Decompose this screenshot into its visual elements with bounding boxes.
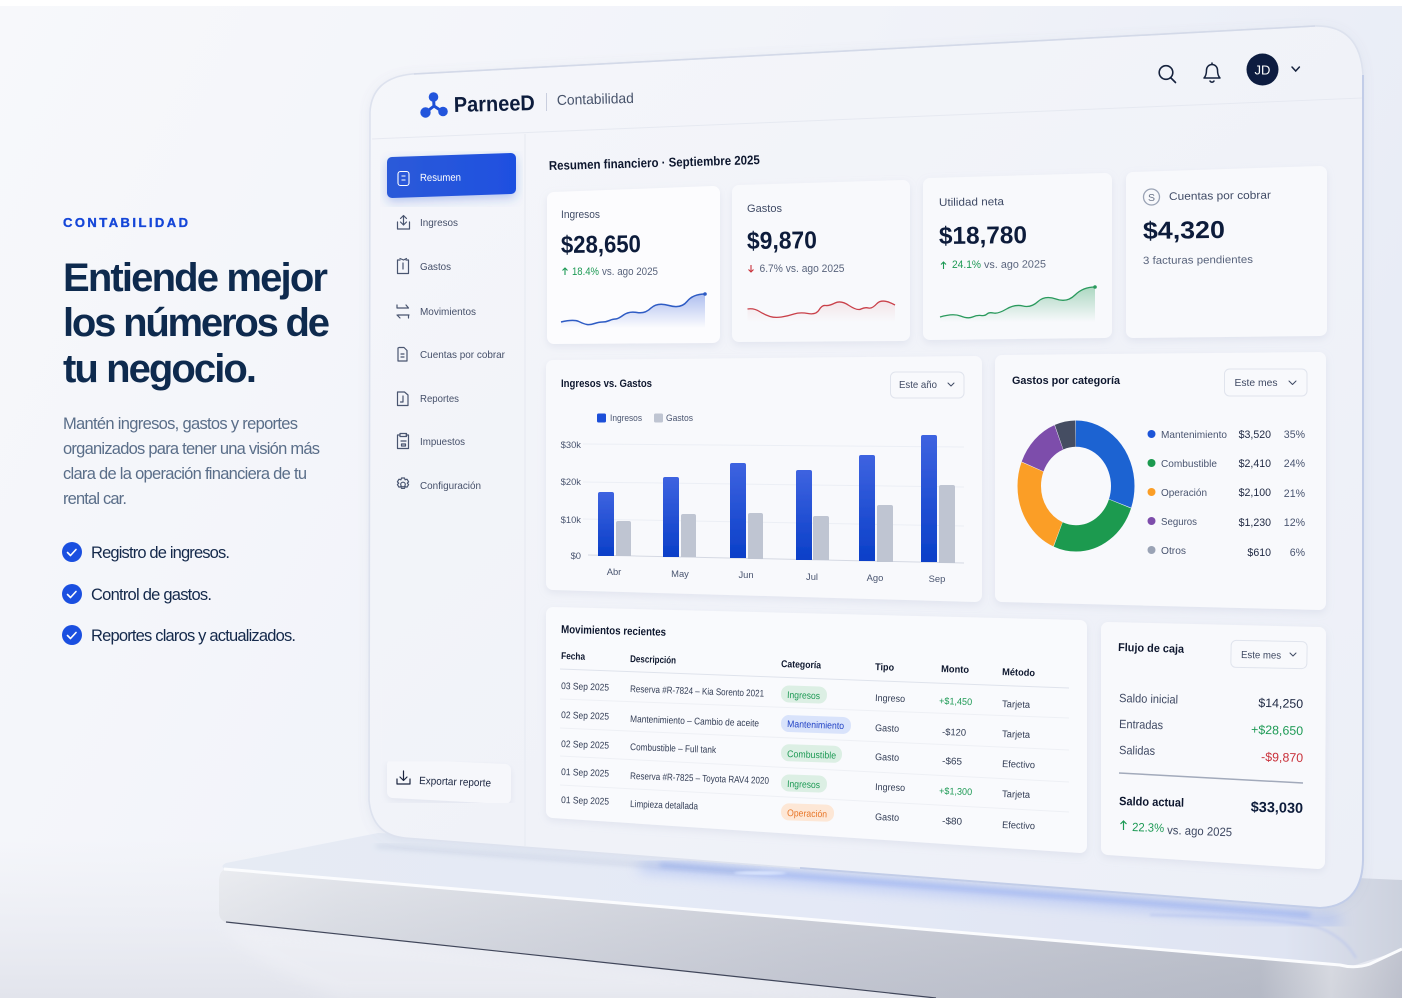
- legend: Combustible: Combustible: [1161, 459, 1217, 470]
- inner blue reflection on top face: [1150, 915, 1356, 958]
- row 3: Combustible: [787, 749, 836, 762]
- dropdown: Este año: [890, 372, 964, 398]
- y axis labels: $10k: [561, 514, 581, 525]
- row 5: Gasto: [875, 812, 899, 824]
- sidebar: [392, 158, 511, 798]
- change: [1120, 820, 1233, 839]
- nav: Configuración: [397, 478, 481, 492]
- x axis labels: Abr: [607, 566, 621, 577]
- nav: Configuración: Configuración: [420, 481, 481, 492]
- change: [941, 258, 1046, 271]
- row 2: Mantenimiento: [787, 719, 844, 732]
- row 1: Reserva #R-7824 – Kia Sorento 2021: [630, 684, 764, 700]
- row 1: +$1,450: [939, 696, 972, 708]
- description paragraph: rental car.: [63, 490, 127, 508]
- dropdown: Este año: Este año: [899, 380, 937, 391]
- nav: Ingresos: [398, 216, 458, 229]
- nav: Movimientos: Movimientos: [420, 307, 476, 318]
- sparkline: [748, 301, 895, 322]
- description paragraph: clara de la operación financiera de tu: [63, 465, 307, 483]
- row: Salidas: -$9,870: [1261, 750, 1303, 765]
- legend: Otros: $610: [1247, 547, 1271, 559]
- check item: reportes: Reportes claros y actualizados.: [91, 627, 296, 645]
- grid and axis: [583, 444, 964, 563]
- legend: Seguros: [1148, 517, 1306, 529]
- table header: Método: [1002, 667, 1035, 679]
- metal base: [219, 833, 1402, 998]
- row 5: Limpieza detallada: [630, 799, 699, 812]
- x axis labels: [607, 566, 945, 584]
- row: Entradas: Entradas: [1119, 717, 1163, 732]
- y axis labels: $30k: [561, 439, 581, 450]
- legend: Operación: [1148, 487, 1306, 500]
- panel title: Gastos por categoría: [1012, 375, 1121, 387]
- donut chart: [1029, 434, 1123, 538]
- main heading: tu negocio.: [63, 347, 257, 391]
- change: 22.3%: [1132, 820, 1165, 835]
- main heading: [63, 256, 330, 391]
- avatar: [1246, 54, 1278, 86]
- table title: Movimientos recientes: [561, 624, 666, 639]
- floor: [0, 840, 1402, 998]
- nav: Ingresos: Ingresos: [420, 218, 458, 229]
- row 5: [561, 795, 1035, 832]
- nav: Movimientos: [397, 305, 476, 318]
- section title: Resumen financiero · Septiembre 2025: [549, 152, 760, 173]
- panel: Flujo de caja: [1108, 629, 1319, 862]
- legend: Operación: $2,100: [1239, 487, 1271, 499]
- row 5: -$80: [942, 816, 962, 828]
- x axis labels: Jul: [806, 571, 818, 582]
- y axis labels: $0: [571, 550, 581, 561]
- legend: Operación: Operación: [1161, 488, 1207, 499]
- change: 18.4%: [572, 266, 600, 278]
- change: [562, 266, 658, 278]
- x axis labels: Sep: [929, 573, 945, 584]
- active nav: Resumen: Resumen: [420, 173, 461, 184]
- main heading: los números de: [63, 301, 330, 345]
- table header: Tipo: [875, 662, 894, 674]
- label: Utilidad neta: [939, 196, 1005, 209]
- left copy block: [62, 215, 330, 645]
- row 4: [561, 767, 1031, 801]
- row 1: [561, 681, 1031, 711]
- change: vs. ago 2025: [1167, 823, 1233, 839]
- legend: Combustible: [1148, 458, 1306, 470]
- panel title: Flujo de caja: [1118, 642, 1185, 656]
- table header: Monto: [941, 664, 969, 676]
- x axis labels: May: [671, 568, 689, 579]
- row: Salidas: Salidas: [1119, 743, 1155, 758]
- table header: Descripción: [630, 654, 676, 667]
- dashboard glass panel: [369, 26, 1363, 908]
- row 1: Ingreso: [875, 693, 905, 705]
- legend: Otros: Otros: [1161, 546, 1186, 557]
- description paragraph: organizados para tener una visión más: [63, 440, 320, 458]
- x axis labels: Ago: [867, 572, 883, 583]
- row: Entradas: +$28,650: [1251, 723, 1303, 738]
- row 3: [561, 739, 1035, 771]
- row: Saldo actual: $33,030: [1250, 800, 1303, 817]
- sparkline: [940, 285, 1097, 322]
- dropdown: Este mes: [1224, 369, 1307, 396]
- chart legend: [597, 412, 693, 423]
- table header: Fecha: [561, 651, 586, 663]
- row: Salidas: [1119, 743, 1303, 765]
- logo: [420, 91, 634, 118]
- row: Entradas: [1119, 717, 1303, 738]
- row 5: Operación: [787, 808, 827, 820]
- base top face: [222, 833, 1402, 966]
- base shadow line: [226, 922, 936, 998]
- check item: ingresos: Registro de ingresos.: [91, 544, 230, 562]
- row 4: 01 Sep 2025: [561, 767, 609, 780]
- nav: Gastos: Gastos: [420, 262, 451, 273]
- row 3: -$65: [942, 756, 962, 768]
- row 1: Tarjeta: [1002, 699, 1031, 711]
- main heading: Entiende mejor: [63, 256, 328, 300]
- icon: bell: [1204, 63, 1220, 82]
- row: Saldo inicial: [1119, 691, 1303, 711]
- row: Saldo inicial: $14,250: [1258, 696, 1303, 711]
- row 2: [561, 710, 1031, 741]
- row 1: Ingresos: [787, 690, 820, 702]
- nav: Reportes: [398, 392, 459, 406]
- export button: [393, 765, 505, 798]
- value: $9,870: [747, 227, 817, 255]
- value: $18,780: [939, 222, 1027, 250]
- base front face: [219, 870, 1402, 998]
- legend: Mantenimiento: [1148, 429, 1306, 441]
- top bar: [420, 54, 1299, 118]
- legend: Mantenimiento: $3,520: [1239, 429, 1271, 441]
- dropdown: Este mes: Este mes: [1234, 378, 1278, 389]
- label: Cuentas por cobrar: [1169, 190, 1271, 203]
- legend: Combustible: $2,410: [1239, 458, 1271, 470]
- KPI card: Utilidad neta: [930, 180, 1105, 333]
- label: Gastos: [747, 203, 782, 215]
- panel: Gastos por categoría: [1002, 359, 1319, 603]
- row 3: Gasto: [875, 752, 899, 764]
- dropdown: Este mes: Este mes: [1241, 650, 1281, 662]
- row 3: Efectivo: [1002, 759, 1035, 771]
- dollar icon: [1144, 189, 1160, 205]
- row 4: Ingreso: [875, 782, 905, 794]
- description paragraph: [63, 415, 320, 508]
- row 4: Tarjeta: [1002, 789, 1031, 801]
- label: Ingresos: [561, 209, 600, 221]
- KPI card: Gastos: [739, 187, 903, 335]
- blue glow: [376, 846, 1340, 921]
- row 4: +$1,300: [939, 786, 972, 798]
- legend: Seguros: 12%: [1284, 517, 1306, 529]
- change: vs. ago 2025: [602, 266, 658, 278]
- row 3: Combustible – Full tank: [630, 742, 716, 756]
- sparkline: [561, 292, 707, 328]
- x axis labels: Jun: [738, 569, 754, 580]
- row 5: Efectivo: [1002, 820, 1035, 832]
- floor reflection: [222, 923, 936, 998]
- legend: Seguros: Seguros: [1161, 517, 1197, 528]
- icon: search: [1159, 66, 1176, 82]
- dropdown: Este mes: [1231, 640, 1307, 669]
- bars: expenses: [616, 485, 955, 563]
- legend: Seguros: $1,230: [1239, 517, 1271, 529]
- legend: Operación: 21%: [1284, 488, 1306, 500]
- change: 6.7% vs. ago 2025: [760, 263, 845, 275]
- row 3: 02 Sep 2025: [561, 739, 609, 752]
- panel: Ingresos vs. Gastos: [553, 363, 975, 595]
- nav: Reportes: Reportes: [420, 394, 459, 405]
- base highlight: [224, 869, 1402, 967]
- nav: Gastos: [398, 258, 451, 274]
- y axis labels: $20k: [561, 476, 581, 487]
- logo name: ParneeD: [454, 91, 535, 117]
- row 4: Reserva #R-7825 – Toyota RAV4 2020: [630, 771, 769, 787]
- row 5: 01 Sep 2025: [561, 795, 609, 808]
- legend: Combustible: 24%: [1284, 458, 1306, 470]
- row 1: 03 Sep 2025: [561, 681, 609, 694]
- y axis labels: [561, 439, 581, 561]
- logo mark: [420, 92, 448, 118]
- avatar: JD: [1255, 62, 1270, 78]
- export button: Exportar reporte: [419, 775, 491, 790]
- check item: gastos: Control de gastos.: [91, 586, 212, 604]
- nav: Impuestos: [398, 434, 465, 448]
- value: $28,650: [561, 231, 641, 259]
- row 2: Gasto: [875, 723, 899, 735]
- top white strip: [0, 0, 1402, 6]
- panel: Movimientos recientes: [553, 614, 1080, 846]
- table header: [560, 651, 1069, 688]
- row: Saldo inicial: Saldo inicial: [1119, 691, 1178, 707]
- chart legend: Gastos: [666, 412, 693, 423]
- nav: Cuentas por cobrar: Cuentas por cobrar: [420, 350, 506, 361]
- panel body: [369, 26, 1363, 908]
- chart legend: Ingresos: [610, 412, 642, 423]
- KPI card: Cuentas por cobrar: [1133, 173, 1320, 331]
- row 4: Ingresos: [787, 779, 820, 791]
- user menu chevron: [1292, 67, 1299, 71]
- value: $4,320: [1143, 217, 1225, 245]
- note: 3 facturas pendientes: [1143, 254, 1253, 267]
- legend: Otros: 6%: [1290, 547, 1306, 559]
- nav: Impuestos: Impuestos: [420, 437, 465, 448]
- bars: income: [598, 435, 937, 562]
- section name: Contabilidad: [557, 91, 634, 109]
- row 2: Mantenimiento – Cambio de aceite: [630, 714, 759, 730]
- KPI card: Ingresos: [554, 193, 713, 337]
- description paragraph: Mantén ingresos, gastos y reportes: [63, 415, 298, 433]
- row 2: 02 Sep 2025: [561, 710, 609, 723]
- change: vs. ago 2025: [984, 258, 1046, 271]
- checklist: [62, 542, 296, 645]
- legend: Mantenimiento: Mantenimiento: [1161, 430, 1227, 441]
- eyebrow: CONTABILIDAD: [63, 215, 188, 230]
- change: 24.1%: [952, 259, 982, 271]
- table header: Categoría: [781, 659, 822, 671]
- row: Saldo actual: [1119, 794, 1303, 817]
- nav: Cuentas por cobrar: [398, 348, 506, 361]
- row 2: -$120: [942, 727, 966, 739]
- row: Saldo actual: Saldo actual: [1119, 794, 1184, 810]
- active nav: Resumen: [392, 158, 511, 193]
- row 2: Tarjeta: [1002, 729, 1031, 741]
- dollar icon: S: [1148, 192, 1155, 204]
- legend: Mantenimiento: 35%: [1284, 429, 1306, 441]
- legend: Otros: [1148, 546, 1306, 559]
- chart title: Ingresos vs. Gastos: [561, 378, 652, 390]
